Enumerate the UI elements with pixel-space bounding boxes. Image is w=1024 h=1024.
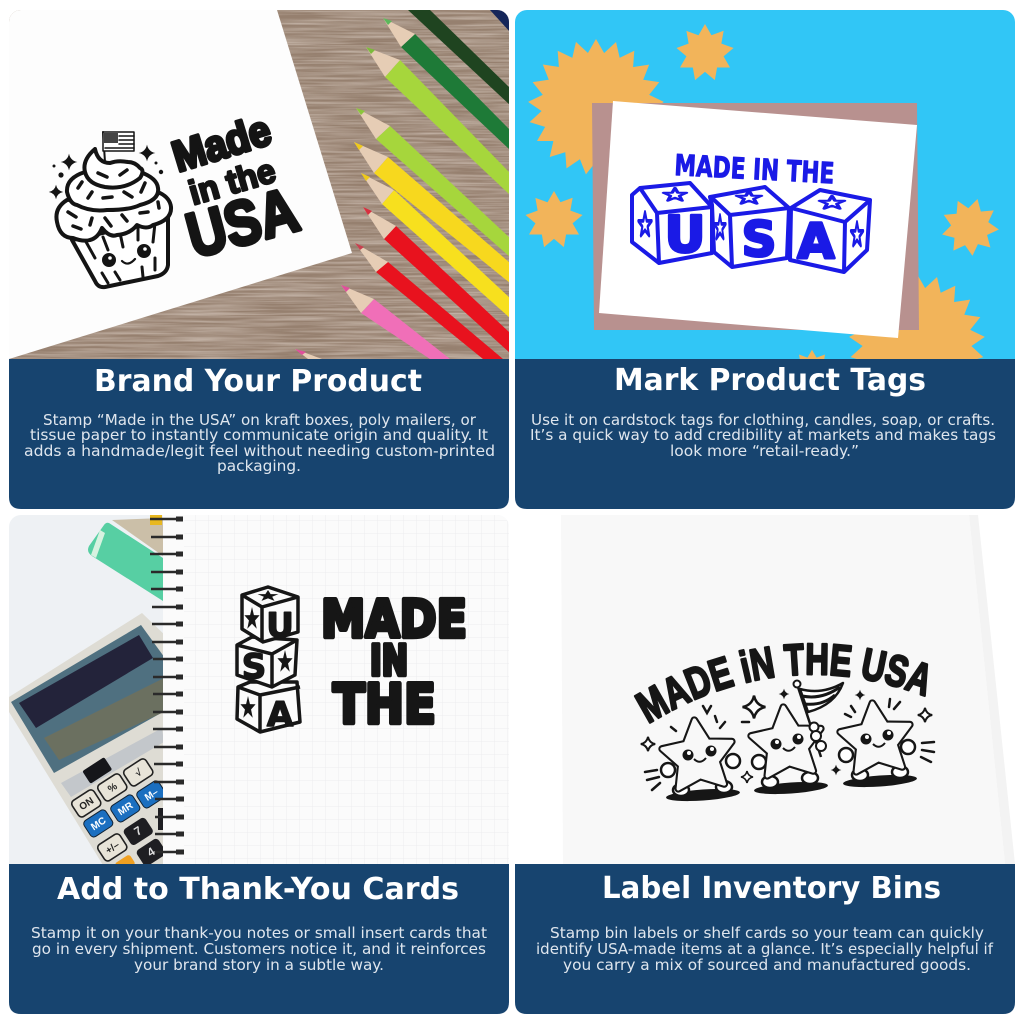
photo: notebook, calculator and eraser: +/–: [104, 840, 122, 857]
stamp text: made in the: MADE IN THE: [674, 148, 835, 190]
icon: cupcake stamp with flag: [49, 132, 171, 287]
body text: Stamp bin labels or shelf cards so your team can quickly: [550, 924, 984, 942]
stamp text: made in the: [321, 590, 467, 736]
block: U: [632, 183, 712, 264]
panel: add to thank-you cards: [9, 515, 509, 1014]
stamp: made in the USA blocks: [632, 148, 870, 272]
caption panel: add to thank-you cards: [9, 864, 509, 1014]
body text: adds a handmade/legit feel without needing custom-printed: [24, 442, 495, 460]
photo: notebook, calculator and eraser: ON: [78, 796, 96, 813]
block: S: S: [242, 647, 266, 687]
block: U: [242, 587, 298, 646]
photo: card on envelope with felt stars: [515, 10, 1015, 359]
notebook spiral binding: [150, 519, 184, 852]
photo: notebook, calculator and eraser: 7: [131, 823, 145, 839]
panel: mark product tags: [515, 10, 1015, 509]
body text: packaging.: [217, 457, 301, 475]
stamp text: Made in the USA: USA: [180, 175, 306, 272]
caption panel: label inventory bins: [515, 864, 1015, 1014]
body text: [24, 411, 495, 475]
icon: star with left pose: [660, 717, 740, 803]
body text: Use it on cardstock tags for clothing, candles, soap, or crafts.: [531, 411, 995, 429]
body text: look more “retail-ready.”: [670, 442, 859, 460]
stamp text: made in the: THE: [333, 673, 436, 736]
block: A: [790, 190, 870, 272]
block: S: [710, 187, 789, 268]
photo: paper and colored pencils on wood: [9, 10, 510, 370]
photo: notebook, calculator and eraser: √: [134, 767, 145, 779]
body text: tissue paper to instantly communicate origin and quality. It: [30, 426, 488, 444]
body text: [530, 411, 996, 460]
body text: [31, 924, 487, 974]
block: A: [237, 682, 300, 735]
body text: your brand story in a subtle way.: [134, 956, 384, 974]
stamp: stacked USA blocks: [237, 587, 300, 735]
panel: label inventory bins: [515, 515, 1015, 1014]
heading: Brand Your Product: [94, 364, 422, 399]
body text: identify USA-made items at a glance. It’s especially helpful if: [536, 940, 994, 958]
stamp text: Made in the USA: [167, 106, 306, 272]
caption panel: mark product tags: [515, 359, 1015, 509]
stamp text: Made in the USA: Made: [167, 106, 277, 182]
photo: notebook, calculator and eraser: MR: [116, 800, 136, 818]
block: U: U: [266, 606, 294, 646]
heading: Mark Product Tags: [614, 363, 926, 398]
block: S: S: [742, 212, 776, 268]
body text: Stamp “Made in the USA” on kraft boxes, poly mailers, or: [43, 411, 477, 429]
body text: It’s a quick way to add credibility at markets and makes tags: [530, 426, 996, 444]
photo: notebook, calculator and eraser: [9, 515, 509, 875]
body text: go in every shipment. Customers notice it, and it reinforces: [32, 940, 486, 958]
block: A: A: [797, 214, 835, 270]
stamp text: made in the: IN: [370, 636, 408, 685]
block: S: [237, 637, 297, 687]
photo: stacked white paper: [969, 515, 1015, 864]
stamp text: Made in the USA: in the: [185, 152, 280, 213]
icon: star with right pose: [838, 700, 917, 789]
photo: notebook, calculator and eraser: MC: [89, 815, 108, 833]
block: A: A: [267, 695, 294, 735]
stamp text: made in the: MADE: [321, 590, 467, 650]
icon: sparkles and motion marks: [641, 689, 934, 790]
heading: Add to Thank-You Cards: [57, 872, 459, 907]
photo: notebook, calculator and eraser: 4: [144, 844, 158, 860]
panel: brand your product: [9, 10, 510, 509]
body text: Stamp it on your thank-you notes or small insert cards that: [31, 924, 487, 942]
heading: Label Inventory Bins: [602, 871, 941, 906]
stamp text: curved made in the USA: MADE iN THE USA: [634, 642, 928, 724]
photo: notebook, calculator and eraser: M–: [143, 787, 161, 804]
body text: [536, 924, 994, 974]
icon: star holding flag: [749, 680, 843, 796]
body text: you carry a mix of sourced and manufactured goods.: [563, 956, 971, 974]
caption panel: brand your product: [9, 359, 509, 509]
block: U: U: [665, 206, 705, 264]
photo: notebook, calculator and eraser: %: [106, 781, 120, 795]
